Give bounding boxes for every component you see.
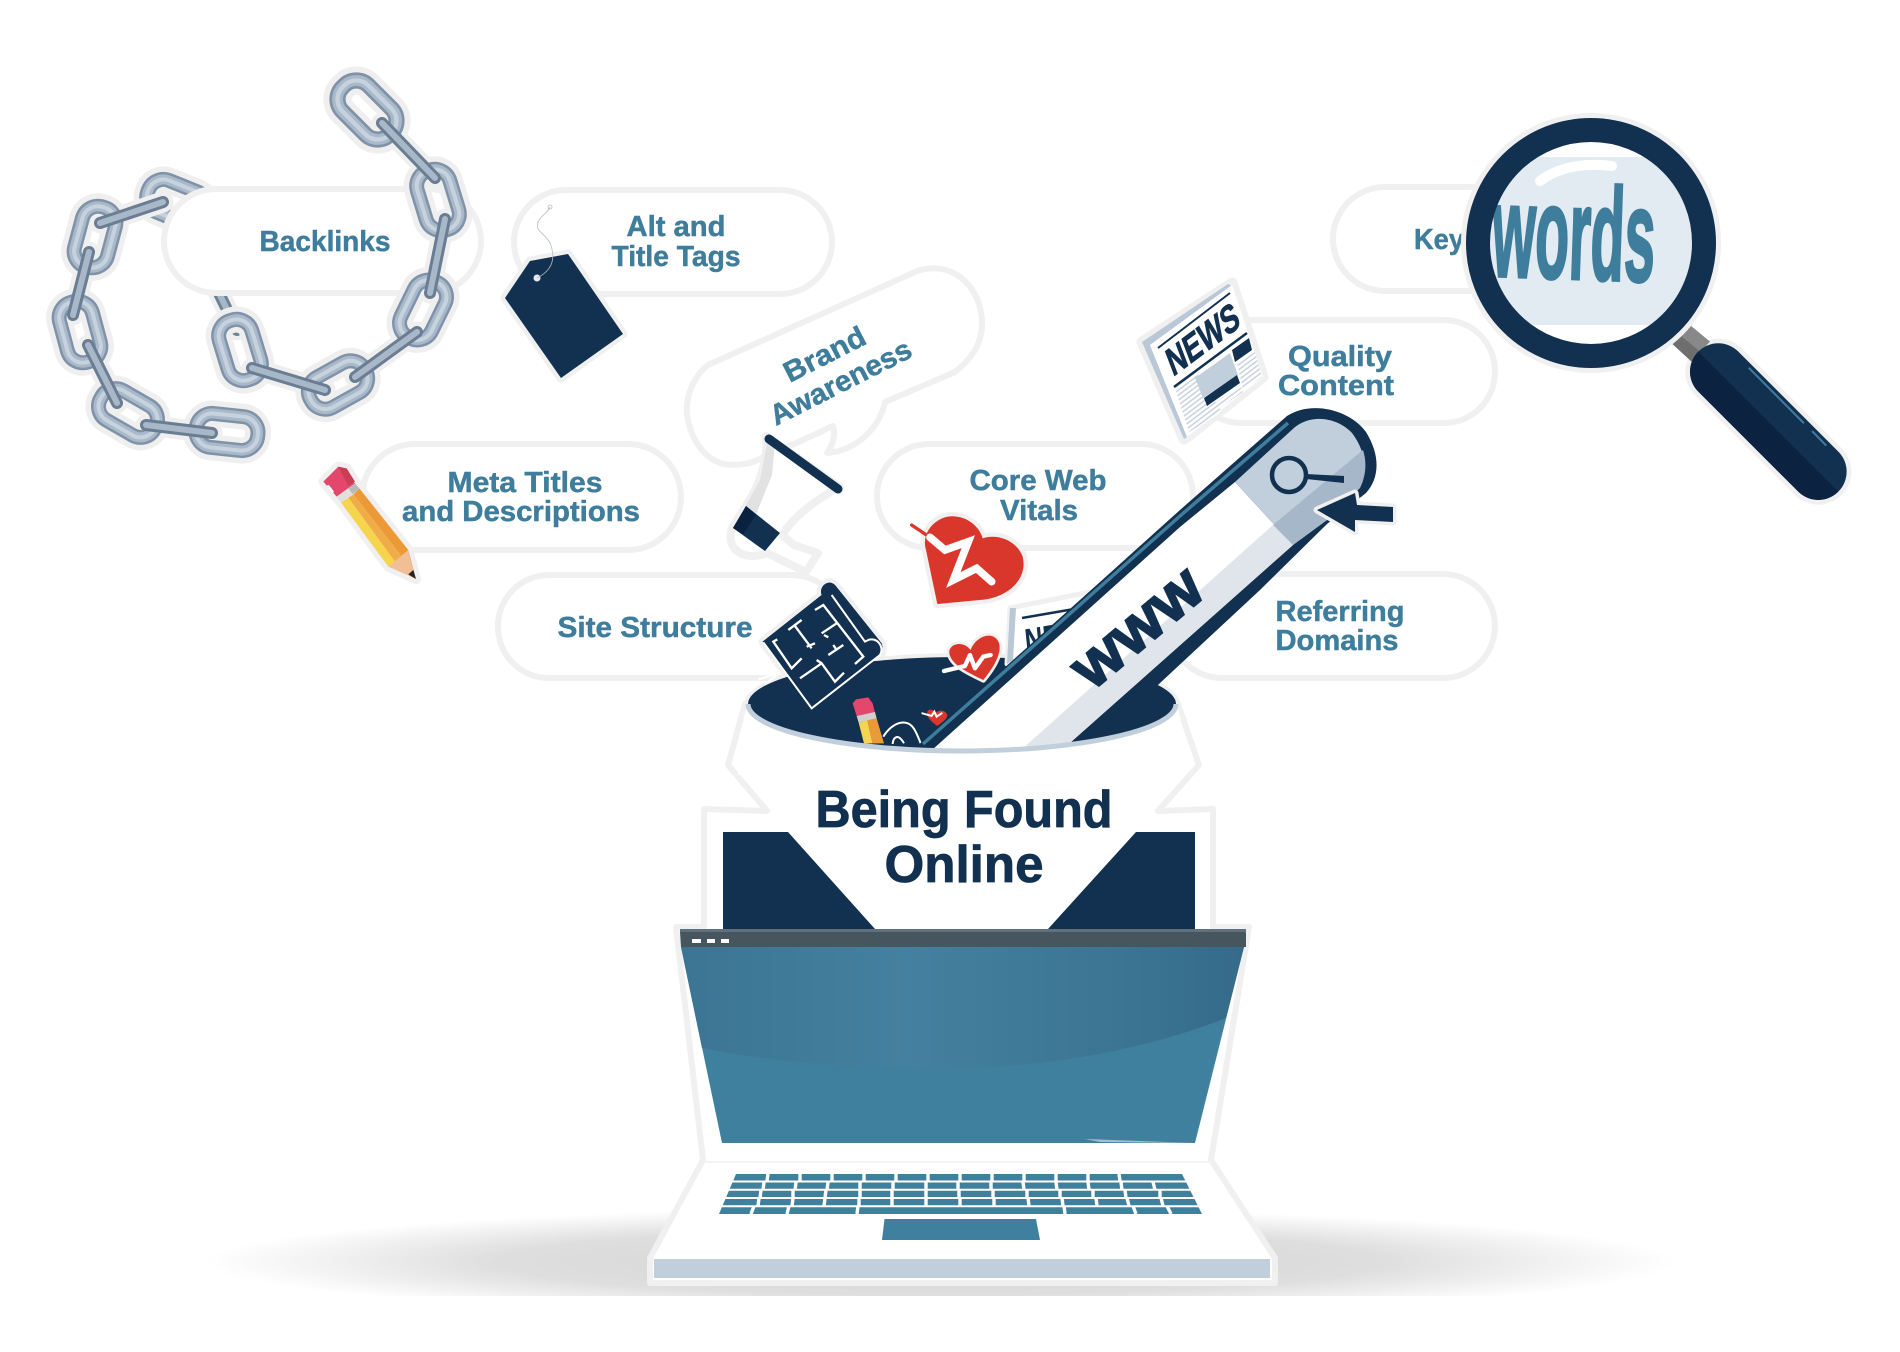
pill: Alt and Title Tags: Title Tags	[612, 241, 740, 273]
pill: Meta Titles and Descriptions: and Descriptions	[402, 496, 640, 528]
title: Online	[884, 836, 1044, 894]
pill: Site Structure	[498, 575, 843, 678]
pill: Site Structure: Site Structure	[558, 612, 752, 644]
pill: Core Web Vitals	[877, 444, 1193, 548]
pill: Backlinks: Backlinks	[260, 226, 390, 258]
title: Being Found	[816, 781, 1112, 839]
icon: heart in opening	[944, 636, 1000, 680]
icon: small newspaper in opening: NEW	[1023, 613, 1085, 661]
icon: chain	[56, 73, 463, 452]
pill: Alt and Title Tags: Alt and	[626, 211, 726, 243]
icon: tiny pencil and tag in opening	[853, 697, 921, 744]
speech bubble: Brand Awareness: Brand	[778, 321, 871, 389]
pill: Keywords: Key	[1414, 224, 1464, 256]
icon: heart with pulse	[912, 516, 1024, 604]
icon: pencil	[323, 467, 416, 579]
icon: tiny heart in opening	[922, 710, 947, 726]
icon: magnifying glass	[1461, 113, 1838, 500]
icon: chain behind backlinks pill	[142, 175, 237, 330]
icon: magnifying glass: words	[1490, 157, 1658, 310]
pill: Alt and Title Tags	[514, 190, 832, 294]
pill: Quality Content: Quality	[1288, 341, 1392, 373]
laptop base edge	[654, 1162, 1270, 1278]
speech bubble: Brand Awareness: Awareness	[765, 334, 917, 432]
WWW address bar	[915, 408, 1393, 750]
bowl opening	[744, 653, 1180, 755]
icon: megaphone	[731, 436, 840, 572]
icon: small newspaper in opening	[1007, 590, 1100, 664]
pill: Meta Titles and Descriptions	[362, 444, 681, 550]
laptop and document silhouette	[650, 704, 1275, 1283]
pill: Referring Domains: Domains	[1276, 625, 1398, 657]
laptop trackpad	[882, 1219, 1040, 1240]
icon: newspaper: NEWS	[1161, 295, 1245, 385]
icon: newspaper	[1142, 283, 1263, 439]
speech bubble: Brand Awareness	[687, 268, 982, 465]
pill: Meta Titles and Descriptions: Meta Titles	[448, 467, 602, 499]
WWW address bar: WWW	[1065, 561, 1216, 700]
laptop keyboard	[715, 1174, 1205, 1214]
pill: Referring Domains: Referring	[1276, 596, 1404, 628]
icon: blueprint over opening	[758, 583, 882, 710]
laptop screen	[680, 929, 1246, 1143]
pill: Keywords	[1333, 187, 1623, 291]
pill: Quality Content: Content	[1278, 370, 1394, 402]
dark document corners	[723, 832, 1195, 929]
pill: Backlinks	[164, 189, 481, 293]
pill: Core Web Vitals: Vitals	[1000, 495, 1078, 527]
opening lower edge	[738, 704, 1186, 775]
pill: Core Web Vitals: Core Web	[970, 465, 1106, 497]
title	[816, 781, 1112, 894]
pill: Referring Domains	[1170, 574, 1495, 678]
icon: site blueprint halo	[763, 583, 882, 710]
ground shadow	[277, 1218, 1602, 1296]
icon: price tag	[505, 205, 623, 378]
pill: Quality Content	[1190, 320, 1495, 423]
